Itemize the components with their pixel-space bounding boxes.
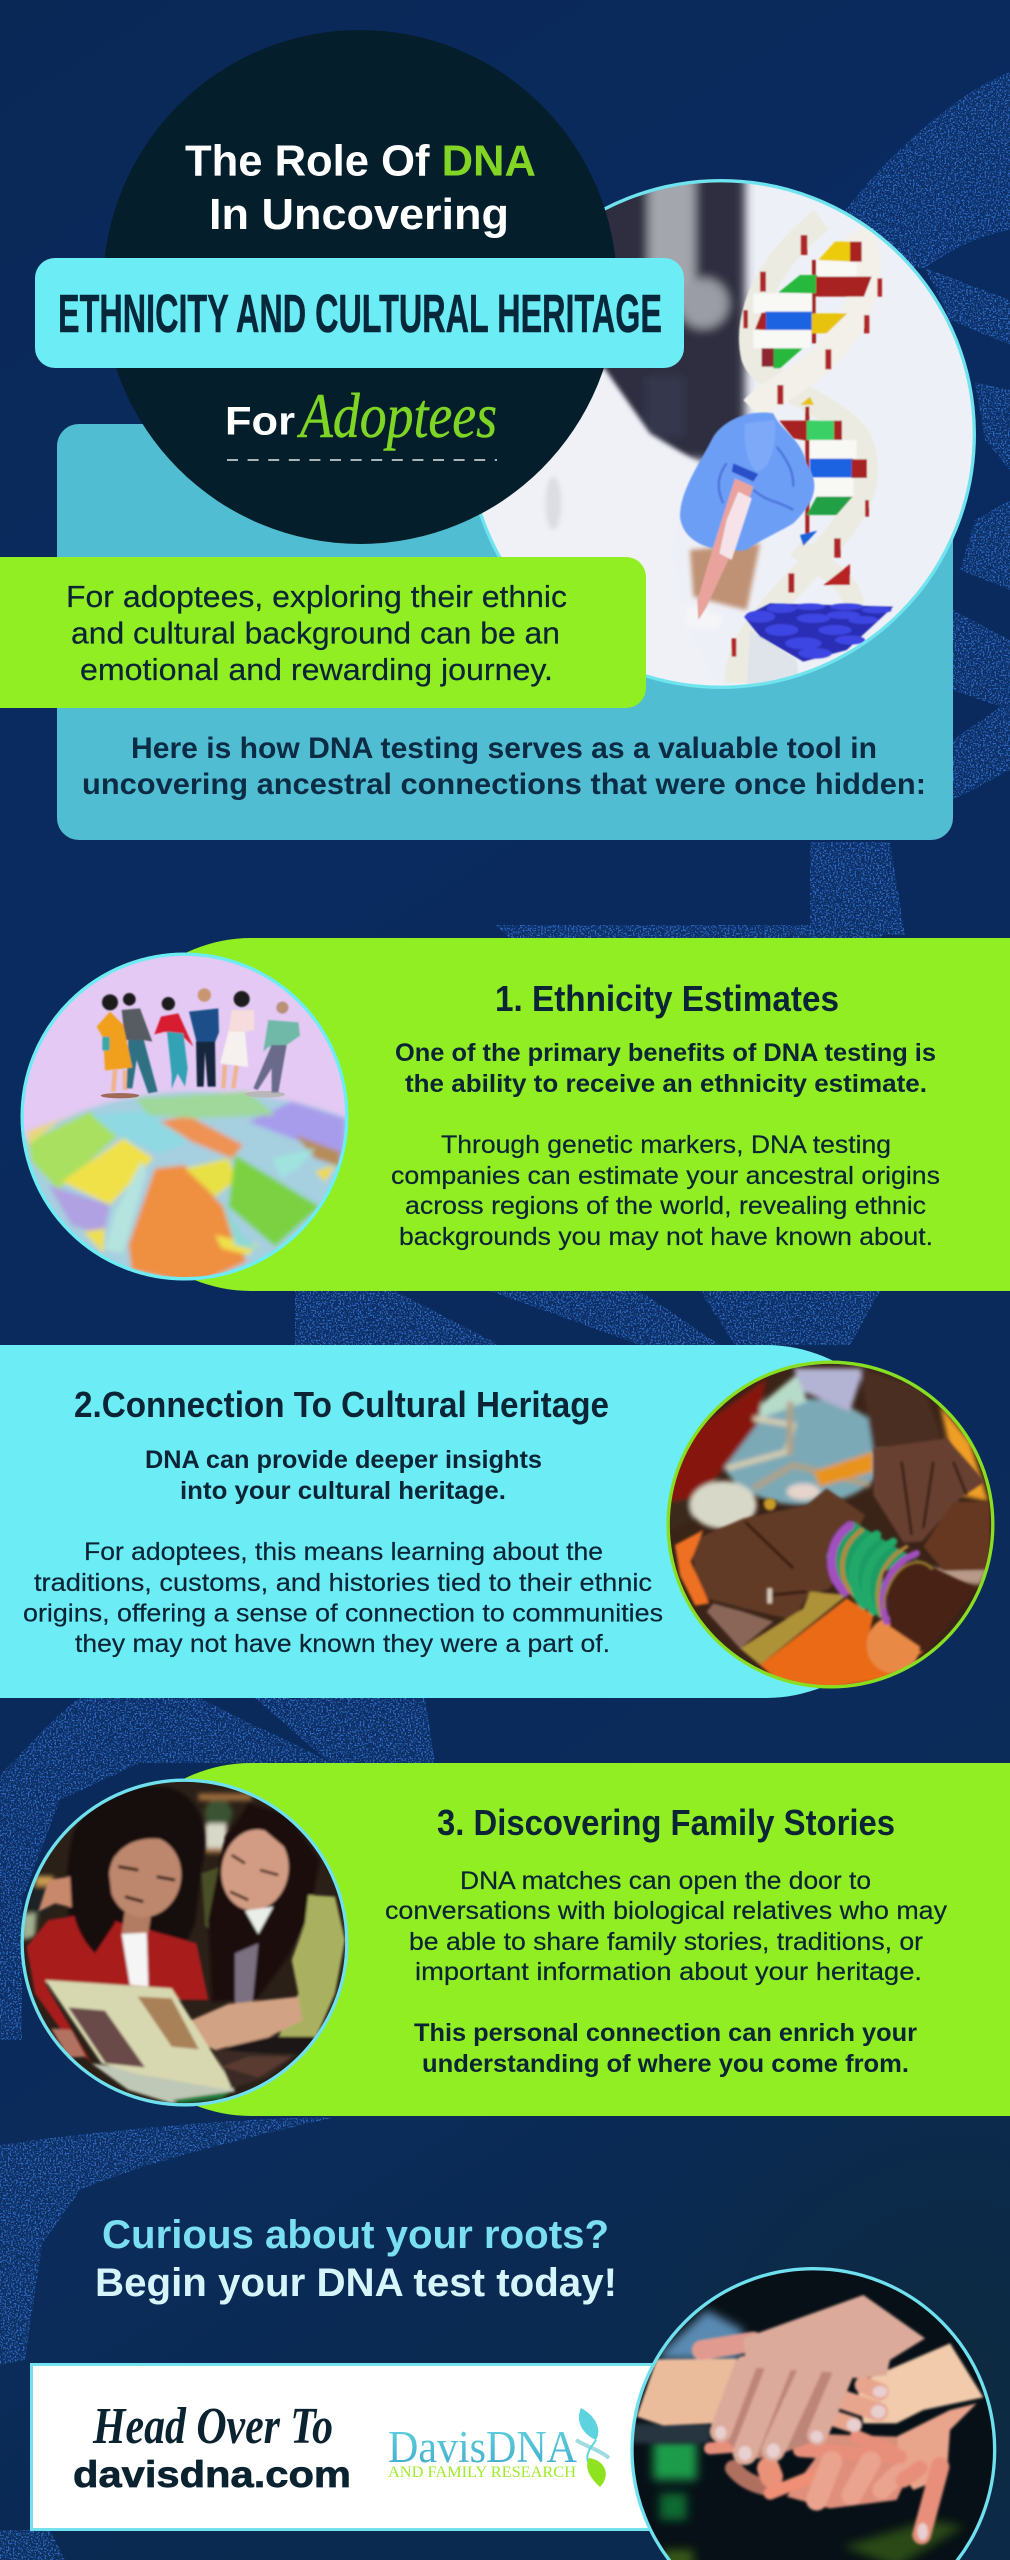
intro lead-in text	[82, 732, 926, 801]
photo: scientist with test tube and DNA model	[479, 179, 976, 689]
title line two: In Uncovering	[209, 190, 509, 239]
subtitle for: For	[225, 400, 295, 444]
bold text	[145, 1446, 542, 1505]
call to action: Curious about your roots?	[102, 2213, 609, 2257]
photo: miniature figures on a globe	[15, 945, 355, 1285]
body text: be able to share family stories, traditions, or	[409, 1928, 923, 1956]
title line one: The Role Of DNA	[185, 136, 536, 186]
body text: companies can estimate your ancestral origins	[391, 1162, 940, 1190]
logo: AND FAMILY RESEARCH	[388, 2464, 576, 2481]
banner	[35, 258, 684, 368]
title circle	[35, 30, 684, 544]
intro lead-in text: uncovering ancestral connections that were once hidden:	[82, 768, 926, 801]
bold text: One of the primary benefits of DNA testing is	[395, 1039, 936, 1067]
body text: traditions, customs, and histories tied to their ethnic	[34, 1569, 652, 1597]
bold text: This personal connection can enrich your	[414, 2019, 917, 2047]
body text	[385, 1867, 948, 1986]
photo: hands with colourful bangles	[660, 1355, 1000, 1695]
intro text: For adoptees, exploring their ethnic	[66, 579, 567, 614]
logo	[388, 2408, 609, 2487]
intro text	[66, 579, 567, 687]
dashed underline	[227, 459, 497, 461]
white contact box	[32, 2364, 712, 2530]
intro lead-in text: Here is how DNA testing serves as a valuable tool in	[131, 732, 877, 765]
head over to: Head Over To	[92, 2398, 333, 2455]
panel: discovering family stories	[101, 1763, 1010, 2116]
body text: across regions of the world, revealing ethnic	[405, 1192, 926, 1220]
logo: DavisDNA	[388, 2422, 577, 2472]
bold text: understanding of where you come from.	[422, 2050, 909, 2078]
panel: connection to cultural heritage	[0, 1345, 916, 1698]
body text: backgrounds you may not have known about.	[399, 1223, 933, 1251]
body text: conversations with biological relatives who may	[385, 1897, 948, 1925]
photo: two women looking at a family album	[15, 1780, 355, 2120]
photo: stacked hands	[630, 2260, 1010, 2560]
callout: intro green box	[0, 557, 646, 708]
heading: 1. Ethnicity Estimates	[495, 978, 839, 1019]
body text: For adoptees, this means learning about the	[84, 1538, 603, 1566]
body text: they may not have known they were a part of.	[75, 1630, 610, 1658]
body text: important information about your heritage.	[415, 1958, 922, 1986]
intro text: emotional and rewarding journey.	[80, 652, 553, 687]
subtitle adoptees: Adoptees	[297, 380, 497, 451]
panel: intro background	[57, 424, 953, 840]
bold text	[395, 1039, 936, 1098]
body text: Through genetic markers, DNA testing	[441, 1131, 891, 1159]
body text	[23, 1538, 663, 1658]
call to action	[95, 2213, 617, 2305]
website: davisdna.com	[73, 2454, 351, 2495]
panel: ethnicity estimates	[101, 938, 1010, 1291]
intro text: and cultural background can be an	[71, 616, 560, 650]
heading: 2.Connection To Cultural Heritage	[74, 1384, 609, 1425]
bold text: into your cultural heritage.	[180, 1477, 506, 1505]
call to action: Begin your DNA test today!	[95, 2261, 617, 2305]
body text: origins, offering a sense of connection to communities	[23, 1600, 663, 1628]
bold text: the ability to receive an ethnicity estimate.	[405, 1070, 927, 1098]
bold text	[414, 2019, 917, 2078]
icon: leaves and helix	[576, 2408, 609, 2487]
body text: DNA matches can open the door to	[460, 1867, 871, 1895]
heading: 3. Discovering Family Stories	[437, 1802, 895, 1843]
body text	[391, 1131, 940, 1251]
bold text: DNA can provide deeper insights	[145, 1446, 542, 1474]
